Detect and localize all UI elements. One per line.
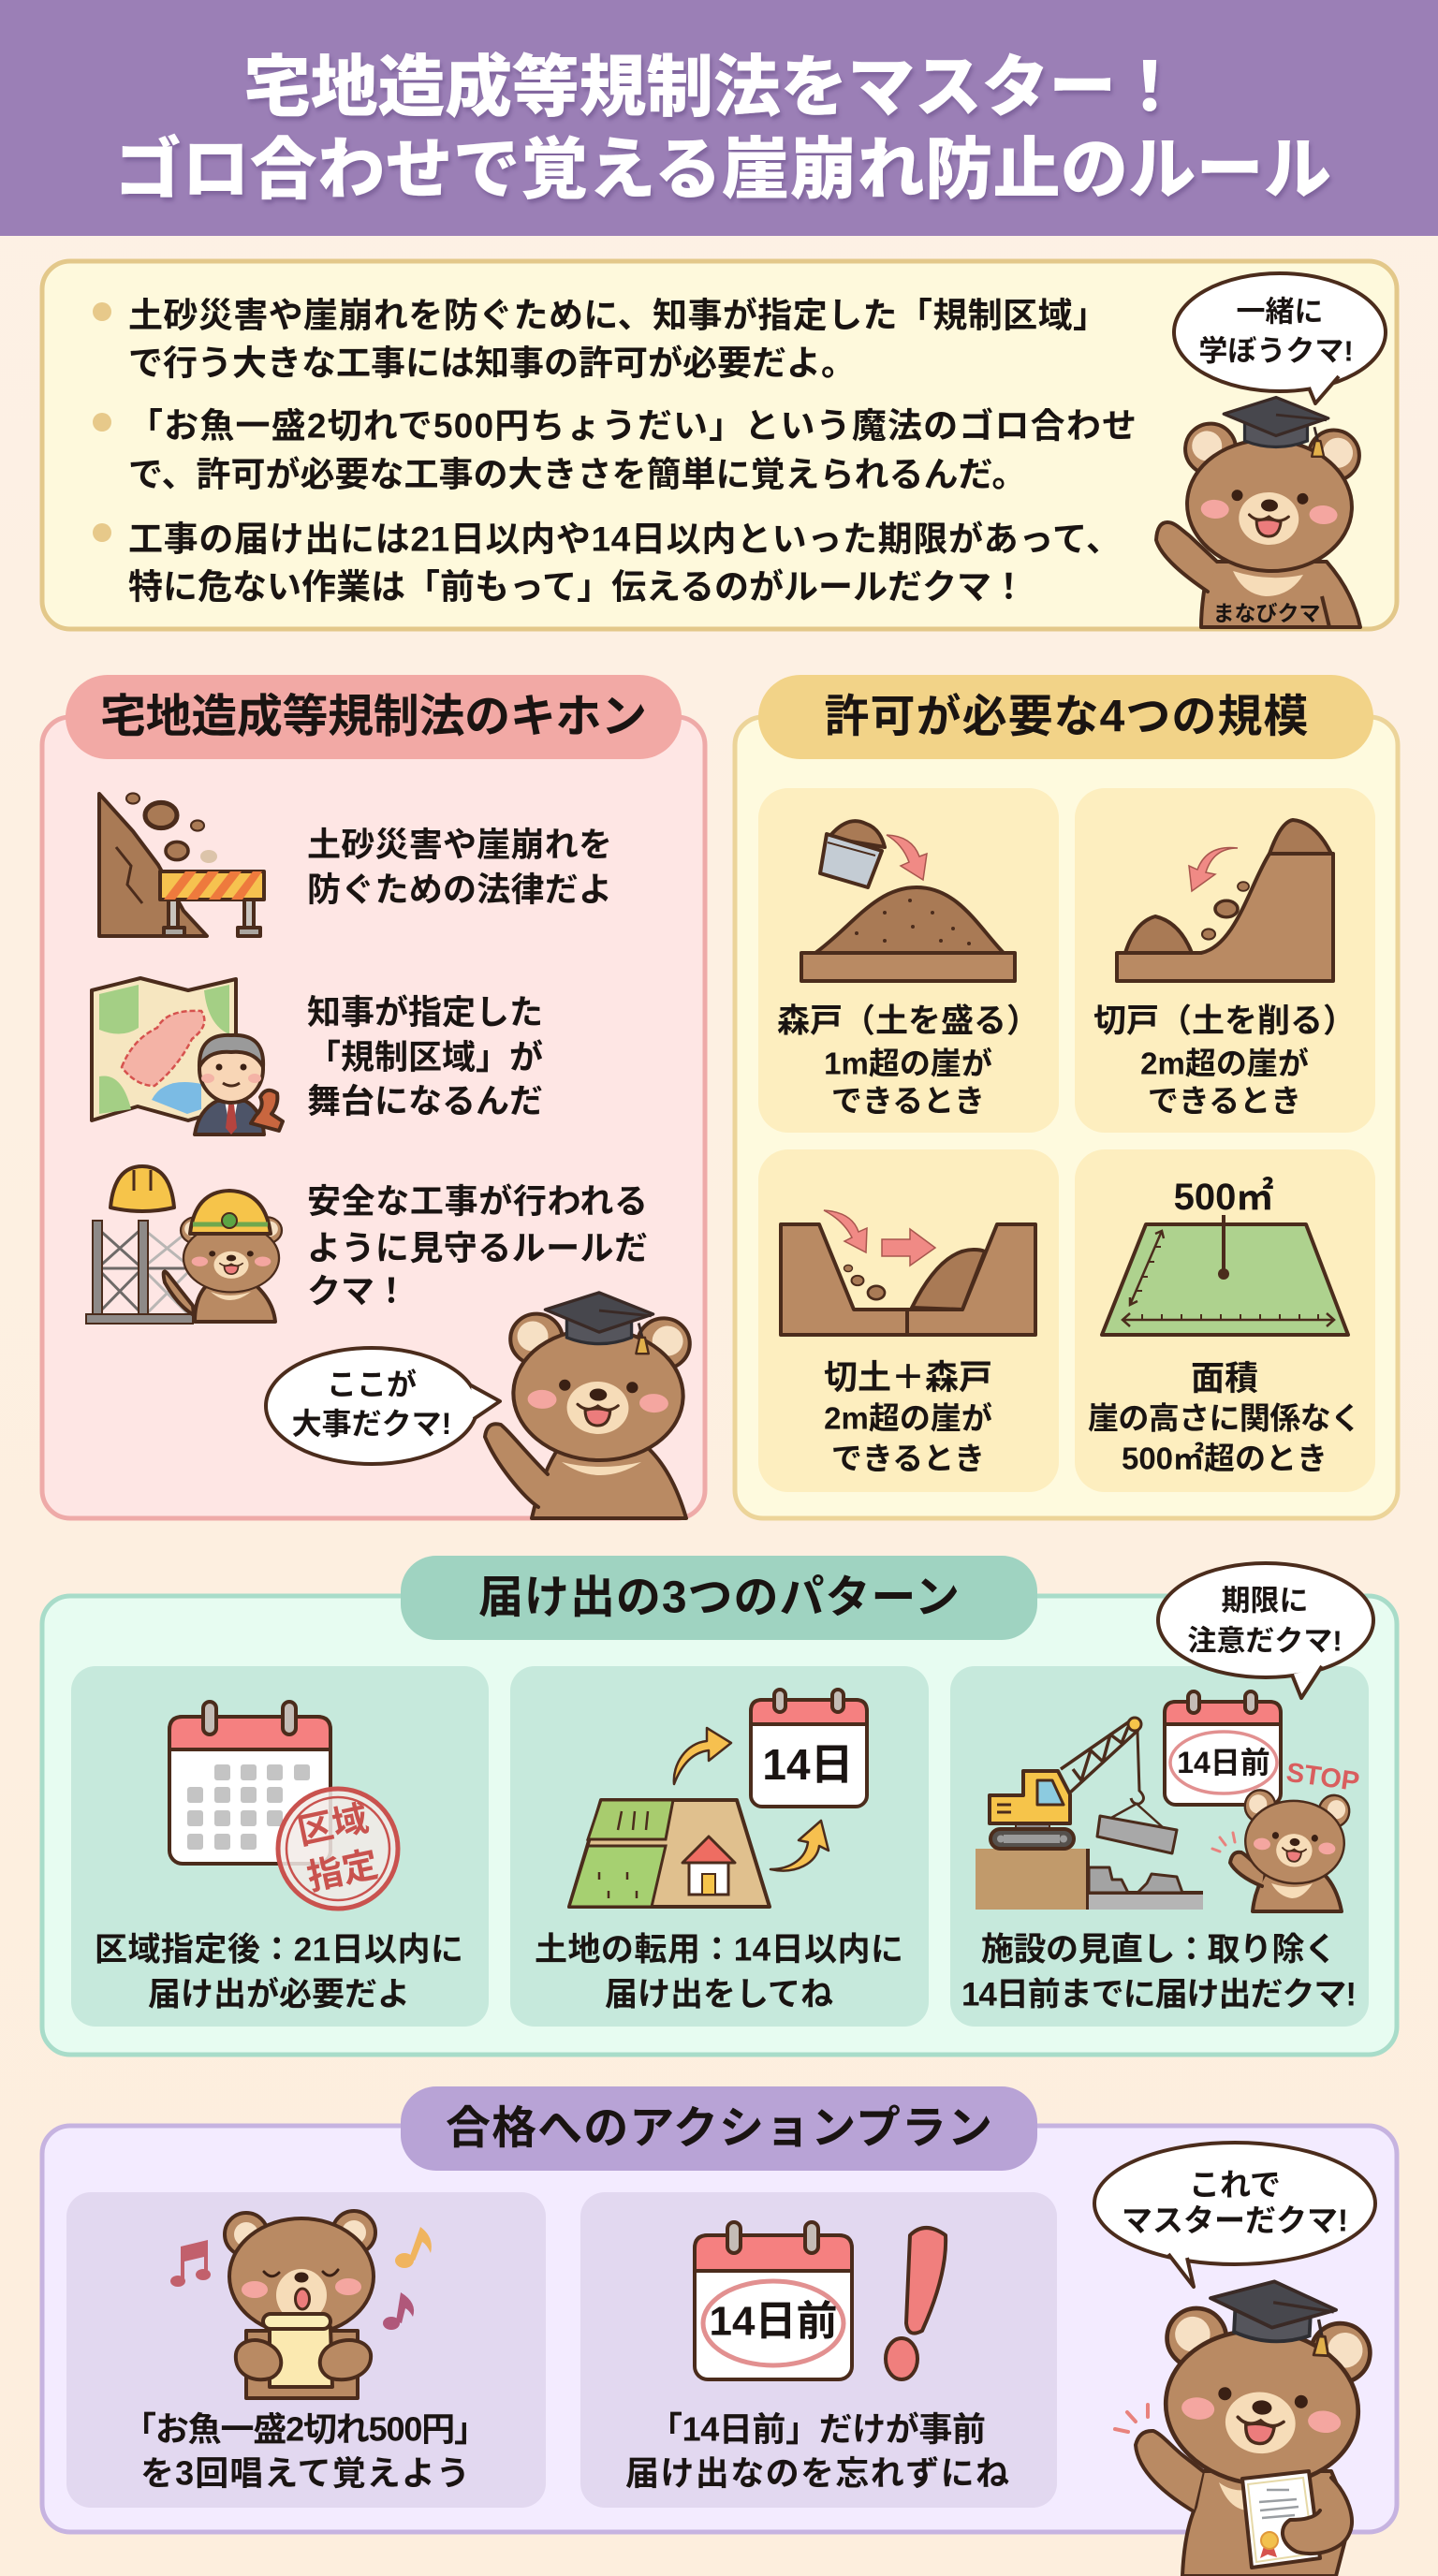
text: regulated zone <box>307 992 543 1120</box>
spark lines <box>1115 2405 1148 2432</box>
icon: calendar with stamp: 区域 <box>294 1799 372 1852</box>
card text <box>123 2409 488 2492</box>
text: safe construction: クマ！ <box>307 1271 408 1310</box>
bullet list: で、許可が必要な工事の大きさを簡単に覚えられるんだ。 <box>128 455 1026 494</box>
card text <box>1088 1359 1361 1475</box>
icon: land plots and calendar: 14日 <box>762 1740 854 1789</box>
speech bubble <box>266 1348 500 1464</box>
card: land conversion <box>510 1666 929 2027</box>
text: safe construction <box>307 1181 648 1310</box>
icon: soil mound and bucket <box>801 821 1015 981</box>
card: area <box>1075 1149 1375 1492</box>
card text: を3回唱えて覚えよう <box>140 2454 470 2492</box>
card text: できるとき <box>1148 1084 1301 1118</box>
diploma <box>1242 2471 1352 2568</box>
title <box>114 51 1331 208</box>
heading: patterns: 届け出の3つのパターン <box>478 1573 960 1623</box>
card: facility review <box>950 1666 1369 2027</box>
card text: 1m超の崖が <box>824 1046 992 1080</box>
icon: land area with dimensions <box>1102 1177 1348 1335</box>
text: regulated zone: 舞台になるんだ <box>307 1082 543 1120</box>
card text <box>535 1932 903 2012</box>
card text <box>95 1932 463 2012</box>
card text: 2m超の崖が <box>1140 1046 1309 1080</box>
card text <box>1093 1003 1356 1118</box>
heading: four scales <box>758 675 1373 759</box>
heading: action plan: 合格へのアクションプラン <box>446 2104 992 2153</box>
text: safe construction: ように見守るルールだ <box>307 1228 648 1267</box>
card text: 届け出をしてね <box>605 1977 833 2012</box>
card text: 施設の見直し：取り除く <box>981 1932 1337 1968</box>
text: regulated zone: 「規制区域」が <box>307 1037 543 1076</box>
card text <box>625 2409 1009 2492</box>
icon: map and governor <box>92 978 283 1134</box>
speech bubble: ここが <box>327 1368 417 1401</box>
icon: singing bear with notes <box>170 2211 432 2398</box>
mascot bear with name shirt: まなびクマ <box>1213 601 1320 625</box>
card text: 切戸（土を削る） <box>1093 1003 1356 1039</box>
text: purpose of law <box>307 826 612 908</box>
icon: calendar and exclamation <box>695 2222 946 2379</box>
speech bubble: 学ぼうクマ! <box>1198 335 1354 367</box>
icon: crane, calendar and bear: 14日前 <box>1177 1746 1270 1779</box>
mascot bear with name shirt <box>1156 398 1360 627</box>
card text: 「14日前」だけが事前 <box>649 2409 986 2449</box>
heading: basics <box>66 675 682 759</box>
bullet list: 「お魚一盛2切れで500円ちょうだい」という魔法のゴロ合わせ <box>128 406 1137 446</box>
panel: basics <box>42 675 705 1518</box>
bullet list: 工事の届け出には21日以内や14日以内といった期限があって、 <box>128 520 1121 558</box>
bullet list: 特に危ない作業は「前もって」伝えるのがルールだクマ！ <box>128 567 1026 607</box>
bullet list: 土砂災害や崖崩れを防ぐために、知事が指定した「規制区域」 <box>128 296 1108 335</box>
card text: 500㎡超のとき <box>1122 1442 1328 1475</box>
heading: basics: 宅地造成等規制法のキホン <box>100 692 647 742</box>
card text: 届け出なのを忘れずにね <box>625 2454 1009 2492</box>
card: sing the mnemonic <box>66 2192 546 2508</box>
panel: three notification patterns <box>42 1556 1397 2055</box>
speech bubble: 期限に <box>1221 1584 1309 1617</box>
card: after zone designation <box>71 1666 489 2027</box>
speech bubble: これで <box>1189 2168 1281 2202</box>
icon: scaffold and helmet bear <box>86 1166 282 1324</box>
text: regulated zone: 知事が指定した <box>307 992 543 1032</box>
speech bubble <box>1094 2143 1375 2287</box>
icon: cut and fill valley <box>781 1210 1035 1335</box>
speech bubble: 大事だクマ! <box>292 1407 451 1441</box>
icon: land area with dimensions: 500㎡ <box>1174 1177 1273 1218</box>
card text <box>961 1932 1357 2012</box>
card: cut plus fill <box>758 1149 1059 1492</box>
icon: cut slope <box>1117 820 1333 981</box>
title: 宅地造成等規制法をマスター！ <box>243 51 1183 125</box>
card text <box>777 1003 1039 1118</box>
speech bubble <box>1174 273 1386 403</box>
icon: crane, calendar and bear <box>976 1691 1361 1911</box>
card: cut <box>1075 788 1375 1133</box>
speech bubble <box>1158 1563 1373 1698</box>
card text: 森戸（土を盛る） <box>777 1003 1039 1039</box>
icon: calendar with stamp: 指定 <box>304 1845 382 1898</box>
card: embankment <box>758 788 1059 1133</box>
speech bubble: 一緒に <box>1236 296 1324 328</box>
text: safe construction: 安全な工事が行われる <box>307 1181 648 1221</box>
card text: できるとき <box>831 1084 985 1118</box>
title: ゴロ合わせで覚える崖崩れ防止のルール <box>114 133 1331 208</box>
bullet list <box>93 296 1137 607</box>
card text: 届け出が必要だよ <box>148 1977 410 2012</box>
heading: action plan <box>401 2086 1037 2171</box>
panel: introduction <box>42 261 1397 629</box>
card text: 14日前までに届け出だクマ! <box>961 1977 1357 2012</box>
heading: patterns <box>401 1556 1037 1640</box>
speech bubble: 注意だクマ! <box>1187 1625 1343 1657</box>
card text: 崖の高さに関係なく <box>1088 1400 1361 1436</box>
icon: land plots and calendar <box>569 1690 867 1907</box>
panel: action plan <box>42 2086 1397 2532</box>
icon: calendar with stamp <box>169 1702 398 1909</box>
card text: 切土＋森戸 <box>824 1357 992 1397</box>
card text: 「お魚一盛2切れ500円」 <box>123 2409 488 2449</box>
text: purpose of law: 防ぐための法律だよ <box>307 871 612 908</box>
card text: 2m超の崖が <box>824 1400 992 1436</box>
header band <box>0 0 1438 236</box>
card text: 面積 <box>1191 1359 1258 1397</box>
icon: calendar and exclamation: 14日前 <box>710 2299 837 2344</box>
card: 14 days before <box>580 2192 1057 2508</box>
card text: 区域指定後：21日以内に <box>95 1932 463 1968</box>
card text: できるとき <box>831 1442 985 1475</box>
mascot bear with diploma <box>1094 2143 1375 2576</box>
text: purpose of law: 土砂災害や崖崩れを <box>307 826 612 863</box>
card text: 土地の転用：14日以内に <box>535 1932 903 1968</box>
speech bubble: マスターだクマ! <box>1122 2203 1348 2237</box>
heading: four scales: 許可が必要な4つの規模 <box>824 693 1309 741</box>
bullet list: で行う大きな工事には知事の許可が必要だよ。 <box>128 344 856 382</box>
icon: cliff collapse and barricade <box>99 793 264 936</box>
mascot bear with speech bubble <box>266 1293 691 1518</box>
icon: crane, calendar and bear: STOP <box>1284 1758 1361 1797</box>
card text <box>824 1357 992 1475</box>
panel: four permit scales <box>735 675 1398 1518</box>
